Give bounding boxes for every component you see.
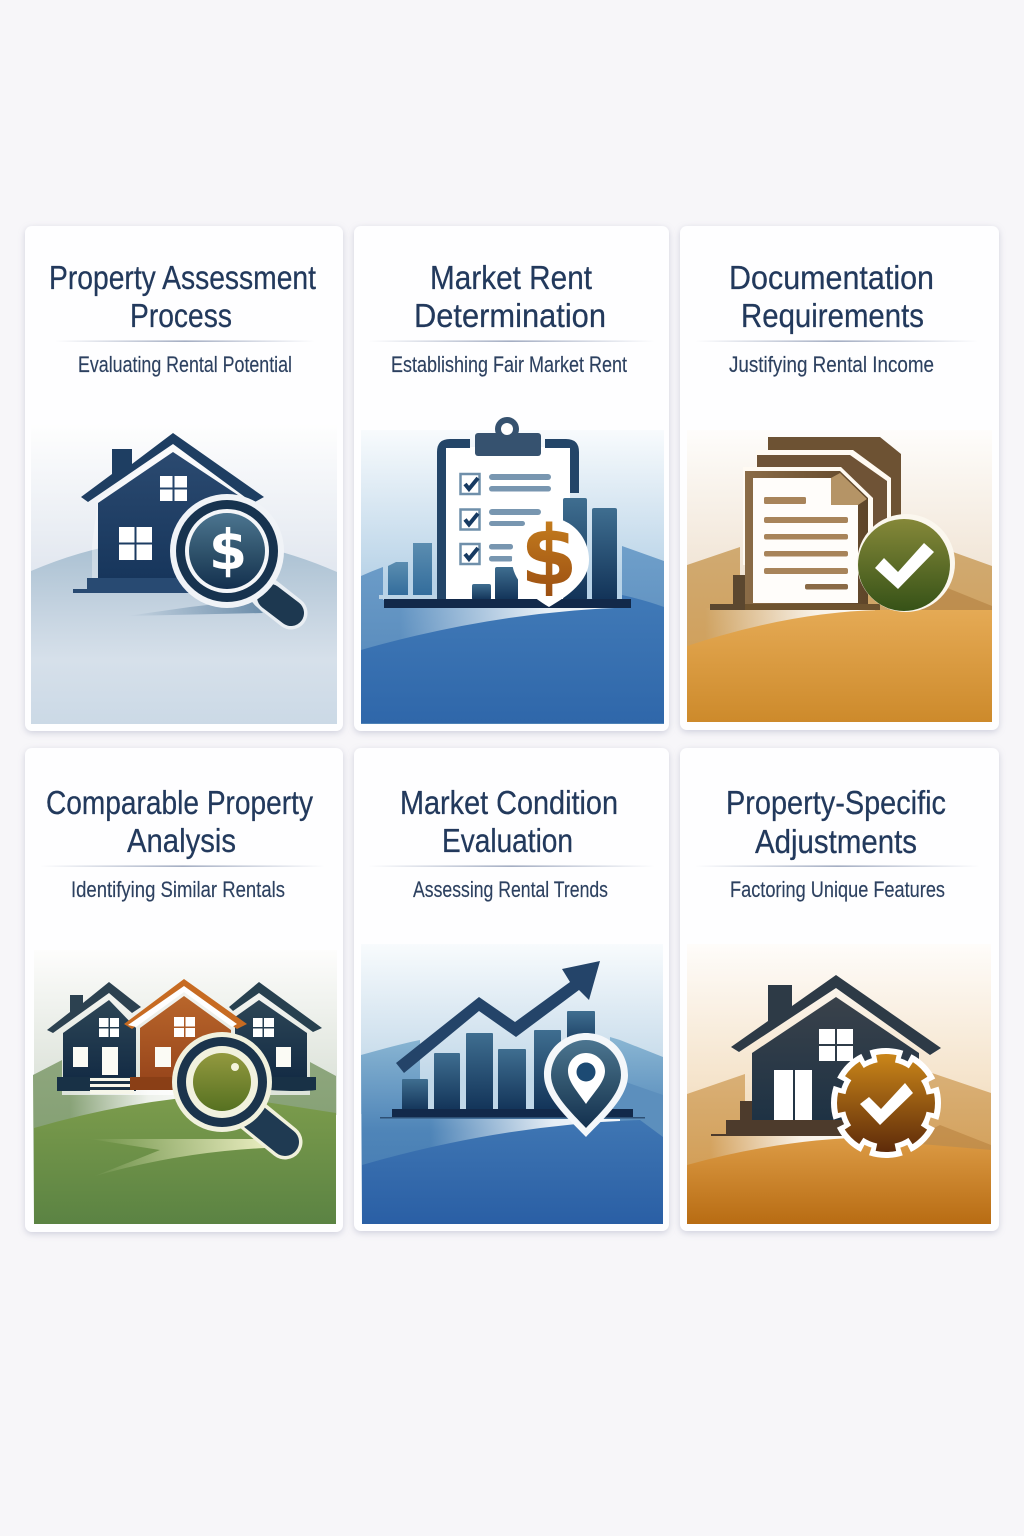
heading: Market Rent bbox=[430, 259, 592, 296]
icon: three houses with magnifier bbox=[47, 979, 322, 1142]
panel: documentation requirements bbox=[680, 226, 999, 730]
card background bbox=[680, 226, 999, 730]
panel: comparable property analysis bbox=[25, 748, 343, 1232]
icon: clipboard with chart and dollar bbox=[379, 417, 631, 608]
icon: rising chart with location pin bbox=[380, 961, 645, 1137]
icon: house with gear check badge bbox=[711, 975, 941, 1151]
panel: market condition evaluation bbox=[354, 748, 669, 1231]
subtitle: Assessing Rental Trends bbox=[413, 877, 608, 902]
card background bbox=[25, 226, 343, 731]
landscape background bbox=[361, 430, 664, 724]
heading: Adjustments bbox=[755, 823, 917, 860]
icon: house with magnifier bbox=[73, 433, 291, 616]
heading: Analysis bbox=[127, 822, 236, 859]
landscape background bbox=[687, 430, 992, 722]
subtitle: Justifying Rental Income bbox=[729, 352, 934, 377]
left house bbox=[47, 982, 141, 1094]
subtitle: Establishing Fair Market Rent bbox=[391, 352, 627, 377]
panel: property-specific adjustments bbox=[680, 748, 999, 1231]
panel: property assessment process bbox=[25, 226, 343, 731]
icon: house with magnifier: $ bbox=[209, 518, 247, 582]
heading: Documentation bbox=[729, 259, 934, 296]
heading: Evaluation bbox=[442, 822, 573, 859]
subtitle: Factoring Unique Features bbox=[730, 877, 945, 902]
icon: clipboard with chart and dollar: $ bbox=[520, 509, 578, 604]
subtitle: Evaluating Rental Potential bbox=[78, 352, 292, 377]
heading: Property Assessment bbox=[49, 259, 316, 296]
right house bbox=[229, 982, 322, 1091]
landscape background bbox=[31, 425, 337, 724]
heading: Market Condition bbox=[400, 784, 618, 821]
card background bbox=[25, 748, 343, 1232]
icon: documents with check badge bbox=[710, 437, 955, 612]
card background bbox=[680, 748, 999, 1231]
landscape background bbox=[33, 950, 337, 1224]
heading: Requirements bbox=[741, 297, 924, 334]
landscape background bbox=[361, 944, 663, 1224]
landscape background bbox=[687, 944, 991, 1224]
panel: market rent determination bbox=[354, 226, 669, 731]
heading: Property-Specific bbox=[726, 784, 946, 821]
heading: Comparable Property bbox=[46, 784, 313, 821]
heading: Determination bbox=[414, 297, 606, 334]
card background bbox=[354, 226, 669, 731]
heading: Process bbox=[130, 297, 232, 334]
subtitle: Identifying Similar Rentals bbox=[71, 877, 285, 902]
card background bbox=[354, 748, 669, 1231]
center house bbox=[124, 979, 247, 1090]
